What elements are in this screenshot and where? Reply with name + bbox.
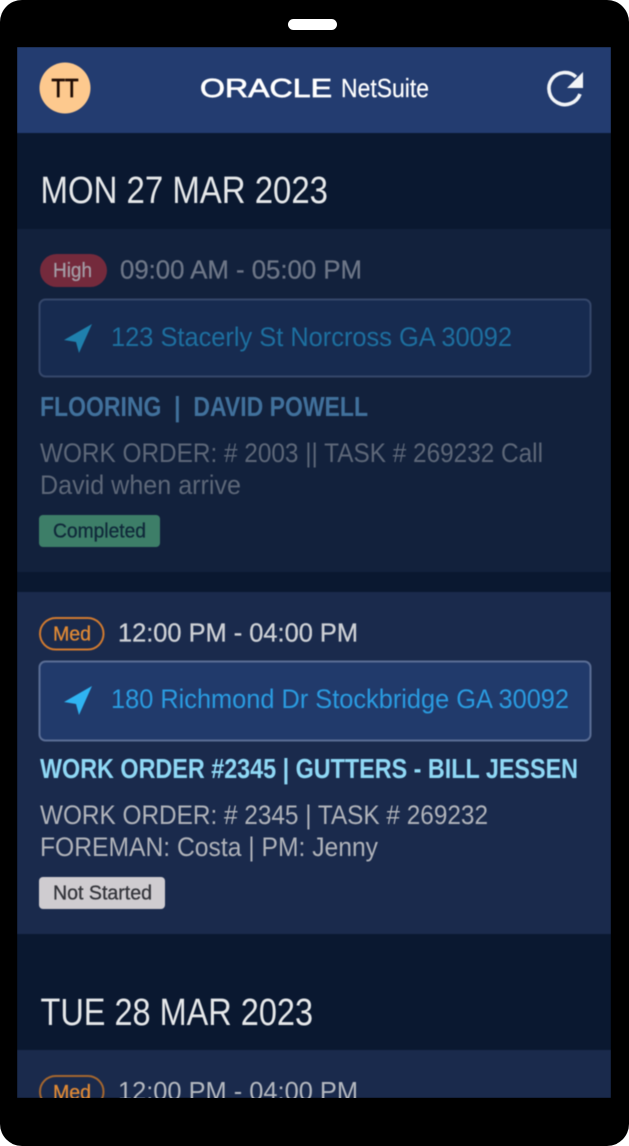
priority badge: Med	[38, 1074, 106, 1098]
panel: completed job card	[17, 229, 611, 572]
time range: 12:00 PM - 04:00 PM	[118, 1076, 358, 1106]
time range: 12:00 PM - 04:00 PM	[118, 618, 358, 648]
Oracle NetSuite logo	[200, 77, 429, 98]
job description: WORK ORDER: # 2345 | TASK # 269232	[40, 800, 488, 830]
address text: 123 Stacerly St Norcross GA 30092	[111, 322, 512, 352]
icon: refresh	[549, 72, 583, 105]
status badge: Not Started	[39, 877, 165, 909]
job description	[40, 442, 542, 495]
avatar	[40, 62, 90, 114]
avatar: TT	[52, 73, 79, 103]
job description: David when arrive	[40, 470, 241, 500]
job description	[40, 800, 488, 862]
priority badge: Med	[40, 618, 104, 650]
panel: not started job card	[17, 592, 611, 934]
job title: FLOORING | DAVID POWELL	[40, 391, 368, 422]
heading: Monday date: MON 27 MAR 2023	[40, 170, 328, 212]
icon: navigation arrow	[64, 686, 92, 715]
priority badge: High: High	[53, 260, 92, 282]
priority badge: Med: Med	[53, 624, 91, 646]
priority badge: High	[40, 254, 107, 287]
icon: navigation arrow	[64, 324, 92, 353]
address text: 180 Richmond Dr Stockbridge GA 30092	[111, 684, 569, 714]
status badge: Not Started: Not Started	[53, 882, 152, 904]
Oracle NetSuite logo: ORACLE	[200, 73, 332, 103]
time range: 09:00 AM - 05:00 PM	[120, 254, 362, 284]
header bar	[17, 47, 611, 133]
heading: Tuesday date: TUE 28 MAR 2023	[40, 992, 313, 1034]
speaker pill	[288, 19, 337, 30]
Oracle NetSuite logo: NetSuite	[341, 73, 429, 103]
address box	[40, 662, 590, 740]
panel: partially visible job card	[17, 1050, 611, 1098]
job description: FOREMAN: Costa | PM: Jenny	[40, 832, 378, 862]
status badge: Completed: Completed	[53, 520, 146, 542]
status badge: Completed	[39, 515, 160, 547]
job description: WORK ORDER: # 2003 || TASK # 269232 Call	[40, 438, 543, 468]
priority badge: Med: Med	[53, 1082, 91, 1104]
address box	[40, 300, 590, 376]
